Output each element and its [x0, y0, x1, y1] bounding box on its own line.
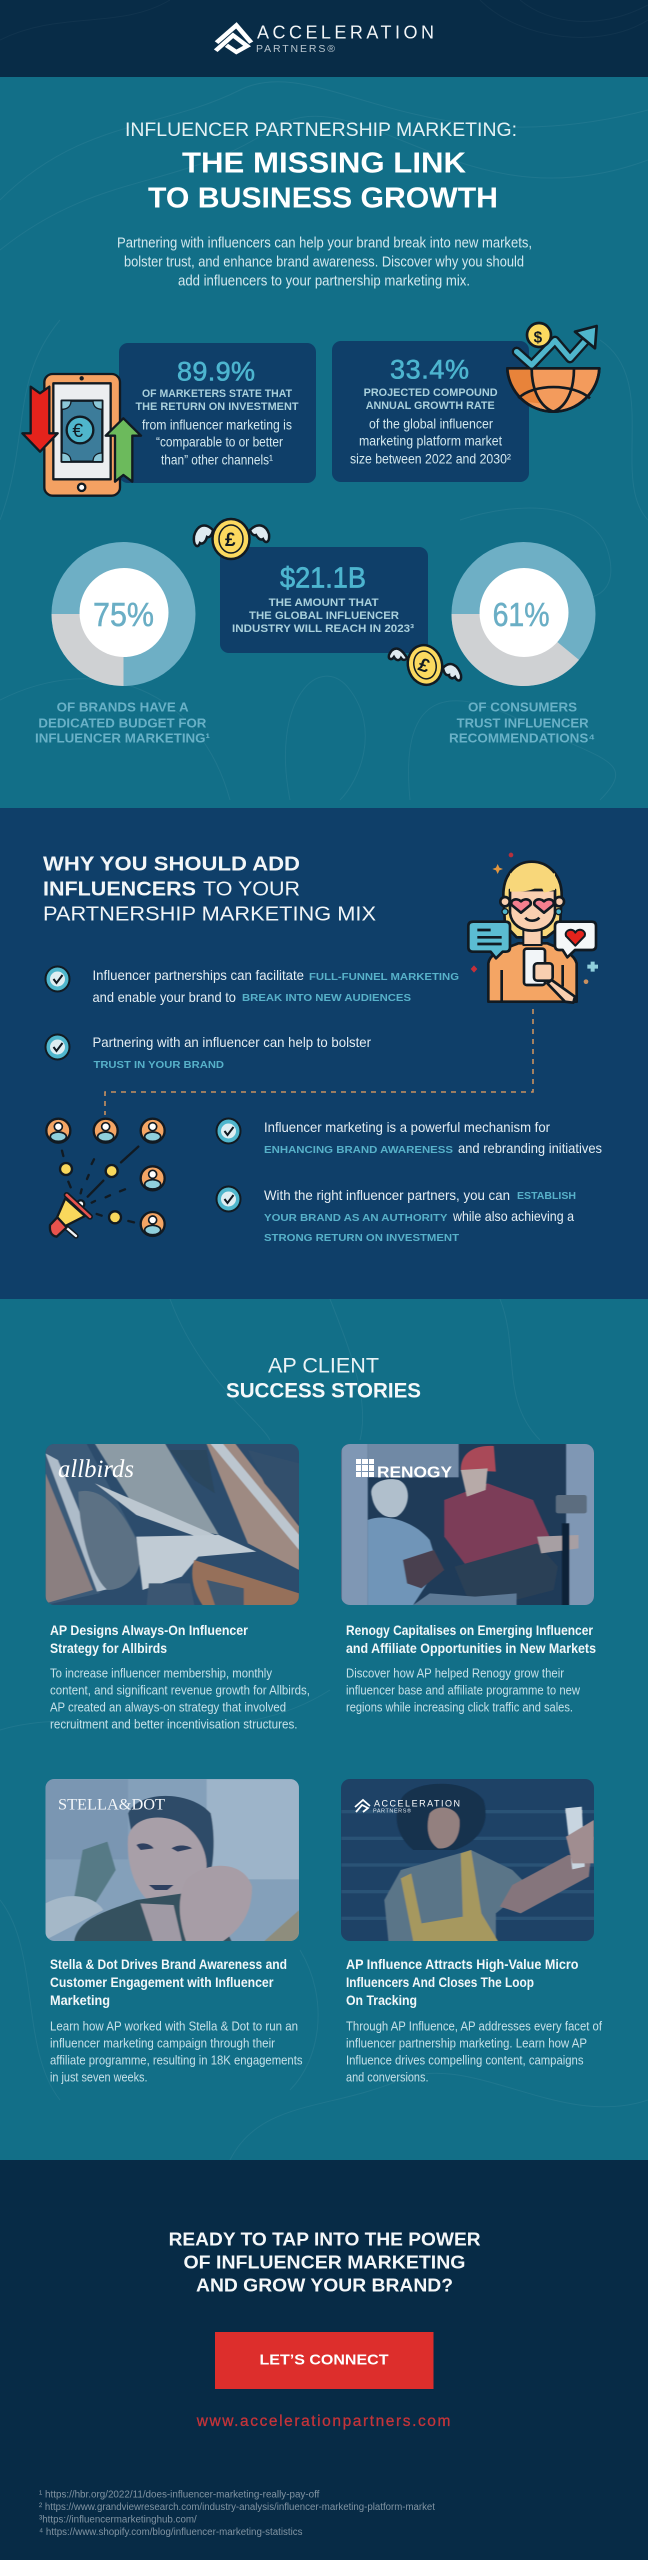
stat card: $21.1B: [220, 547, 428, 653]
text block: AP Influence story: and conversions.: [346, 2070, 428, 2084]
chart: 75% donut: 75%: [93, 596, 154, 633]
icon: check: [46, 1034, 70, 1060]
panel: client success stories: [0, 1299, 648, 2160]
panel: call to action and footer: [0, 2160, 648, 2560]
icon: phone with money and arrows: [22, 374, 141, 496]
list item: full-funnel marketing: Influencer partnerships can facilitate: [92, 967, 304, 983]
link: website: www.accelerationpartners.com: [196, 2413, 450, 2430]
list item: full-funnel marketing: [46, 966, 459, 1005]
list item: full-funnel marketing: and enable your brand to: [92, 989, 236, 1005]
stat card: 89.9%: [119, 343, 316, 483]
heading: why you should add influencers: TO YOUR: [203, 877, 300, 900]
text block: AP Influence story: Influence drives compelling content, campaigns: [346, 2054, 584, 2068]
heading: call to action: OF INFLUENCER MARKETING: [184, 2252, 466, 2272]
text block: AP Influence story: [346, 2020, 602, 2084]
photo: woman taking selfie: [341, 1779, 595, 1941]
list item: establish authority: while also achieving a: [452, 1208, 574, 1224]
stat card: 33.4%: marketing platform market: [359, 434, 502, 448]
text block: Renogy story: regions while increasing click traffic and sales.: [346, 1700, 573, 1714]
heading: Stella and Dot story: Stella & Dot Drives Brand Awareness and: [50, 1956, 287, 1972]
text block: Allbirds story: AP created an always-on strategy that involved: [50, 1700, 286, 1714]
heading: AP client success stories: AP CLIENT: [268, 1354, 379, 1378]
heading: Allbirds story: [50, 1622, 248, 1656]
text block: Renogy story: Discover how AP helped Renogy grow their: [346, 1666, 564, 1680]
heading: AP client success stories: SUCCESS STORIES: [226, 1380, 421, 1402]
logo: Acceleration Partners small: ACCELERATION: [374, 1798, 460, 1808]
text block: consumers trust: [449, 700, 595, 746]
icon: person: [141, 1212, 165, 1236]
list item: trust in your brand: TRUST IN YOUR BRAND: [94, 1059, 224, 1071]
logo: Renogy: RENOGY: [377, 1464, 453, 1482]
stat card: 89.9%: from influencer marketing is: [142, 418, 292, 432]
icon: check: [216, 1118, 240, 1144]
text block: brands with budget: DEDICATED BUDGET FOR: [38, 716, 206, 730]
heading: AP Influence story: AP Influence Attracts High-Value Micro: [346, 1956, 578, 1972]
heading: main title: TO BUSINESS GROWTH: [148, 182, 498, 214]
text block: footnotes: ³https://influencermarketinghub.com/: [39, 2514, 197, 2526]
stat card: 33.4%: size between 2022 and 2030²: [350, 452, 511, 466]
card: Stella and Dot: [45, 1779, 303, 2084]
chart: 61% donut: [452, 542, 596, 686]
chart: 75% donut: [52, 542, 196, 686]
heading: Allbirds story: AP Designs Always-On Influencer: [50, 1622, 248, 1638]
text block: footnotes: ¹ https://hbr.org/2022/11/does-influencer-marketing-really-pay-off: [39, 2490, 320, 2500]
heading: why you should add influencers: PARTNERSHIP MARKETING MIX: [43, 902, 376, 925]
stat card: 33.4%: of the global influencer: [369, 416, 493, 432]
text block: footnotes: ² https://www.grandviewresearch.com/industry-analysis/influencer-marketing-platform-market: [39, 2502, 435, 2513]
heading: call to action: AND GROW YOUR BRAND?: [196, 2274, 453, 2296]
list item: full-funnel marketing: FULL-FUNNEL MARKETING: [309, 971, 459, 983]
heading: Stella and Dot story: Customer Engagement with Influencer: [50, 1974, 274, 1990]
list item: establish authority: ESTABLISH: [517, 1190, 576, 1202]
heading: Stella and Dot story: [50, 1956, 287, 2008]
icon: person: [46, 1119, 70, 1143]
logo: Acceleration Partners small: PARTNERS®: [373, 1808, 411, 1814]
icon: winged coin bottom: [389, 641, 461, 689]
icon: megaphone network: [46, 1119, 165, 1237]
icon: globe with growth arrow: $: [534, 330, 543, 347]
stat card: 33.4%: [332, 341, 529, 482]
text block: AP Influence story: influencer partnership marketing. Learn how AP: [346, 2036, 587, 2050]
icon: globe with growth arrow: [507, 323, 599, 412]
text block: Renogy story: influencer base and affiliate programme to new: [346, 1684, 581, 1698]
heading: main title: THE MISSING LINK: [182, 147, 466, 179]
list item: establish authority: STRONG RETURN ON INVESTMENT: [264, 1232, 460, 1244]
stat card: $21.1B: $21.1B: [280, 562, 366, 594]
chart: 61% donut: 61%: [493, 596, 550, 633]
text block: Stella and Dot story: influencer marketing campaign through their: [50, 2036, 275, 2050]
heading: call to action: [169, 2228, 481, 2296]
text block: intro paragraph: [117, 236, 532, 290]
text block: intro paragraph: add influencers to your partnership marketing mix.: [178, 274, 470, 290]
text block: brands with budget: OF BRANDS HAVE A: [57, 700, 189, 714]
arrow: dashed connector: [105, 1009, 533, 1115]
logo: Acceleration Partners: PARTNERS®: [256, 43, 335, 55]
icon: check: [216, 1186, 240, 1212]
list item: establish authority: With the right influencer partners, you can: [264, 1187, 510, 1203]
card: Renogy: [341, 1444, 596, 1714]
stat card: 33.4%: 33.4%: [390, 355, 469, 385]
stat card: 89.9%: THE RETURN ON INVESTMENT: [136, 401, 299, 413]
stat card: $21.1B: THE AMOUNT THAT: [269, 597, 379, 609]
heading: why you should add influencers: WHY YOU SHOULD ADD: [43, 852, 300, 875]
list item: trust in your brand: [46, 1034, 371, 1071]
icon: person: [141, 1166, 165, 1190]
button: let's connect: [215, 2332, 434, 2389]
card: AP Influence: [341, 1779, 602, 2084]
icon: winged coin top: £: [225, 530, 236, 551]
text block: consumers trust: RECOMMENDATIONS⁴: [449, 732, 595, 746]
heading: Stella and Dot story: Marketing: [50, 1992, 110, 2008]
heading: AP client success stories: [226, 1354, 421, 1402]
heading: main title: [148, 147, 498, 214]
photo: Allbirds shoes: [45, 1444, 299, 1605]
photo: woman with earring: [45, 1779, 299, 1941]
list item: brand awareness: and rebranding initiatives: [458, 1140, 602, 1156]
icon: winged coin top: [194, 519, 269, 559]
button: let's connect: LET’S CONNECT: [260, 2352, 388, 2368]
stat card: 89.9%: than” other channels¹: [161, 452, 273, 468]
text block: brands with budget: [35, 700, 210, 746]
icon: person: [94, 1119, 118, 1143]
logo: Acceleration Partners: ACCELERATION: [257, 22, 434, 42]
heading: why you should add influencers: [43, 852, 376, 925]
icon: check: [46, 966, 70, 992]
heading: AP Influence story: Influencers And Closes The Loop: [346, 1974, 534, 1990]
text block: Stella and Dot story: [50, 2020, 302, 2084]
text block: Stella and Dot story: in just seven weeks.: [50, 2070, 148, 2084]
text block: consumers trust: TRUST INFLUENCER: [457, 716, 589, 730]
panel: intro and statistics: [0, 77, 648, 808]
text block: intro paragraph: bolster trust, and enhance brand awareness. Discover why you should: [124, 254, 524, 270]
icon: winged coin bottom: £: [415, 654, 433, 678]
logo: Acceleration Partners: [216, 22, 434, 55]
text block: Stella and Dot story: Learn how AP worked with Stella & Dot to run an: [50, 2020, 298, 2034]
stat card: 89.9%: “comparable to or better: [156, 434, 283, 450]
text block: footnotes: [39, 2490, 435, 2538]
heading: Renogy story: and Affiliate Opportunities in New Markets: [346, 1640, 596, 1656]
heading: AP Influence story: [346, 1956, 578, 2008]
list item: brand awareness: ENHANCING BRAND AWARENESS: [264, 1144, 453, 1156]
text block: consumers trust: OF CONSUMERS: [468, 700, 577, 714]
list item: trust in your brand: Partnering with an influencer can help to bolster: [92, 1034, 371, 1050]
icon: influencer with speech bubbles: [468, 853, 598, 1003]
heading: Allbirds story: Strategy for Allbirds: [50, 1640, 167, 1656]
heading: why you should add influencers: INFLUENCERS: [43, 877, 196, 900]
logo: allbirds: allbirds: [58, 1456, 134, 1483]
stat card: 89.9%: OF MARKETERS STATE THAT: [142, 388, 292, 400]
text block: Stella and Dot story: affiliate programme, resulting in 18K engagements: [50, 2054, 302, 2068]
list item: brand awareness: [216, 1118, 602, 1156]
panel: header bar: [0, 0, 648, 77]
heading: Renogy story: [346, 1622, 596, 1656]
logo: Renogy: [356, 1459, 453, 1482]
text block: AP Influence story: Through AP Influence, AP addresses every facet of: [346, 2020, 602, 2034]
text block: footnotes: ⁴ https://www.shopify.com/blog/influencer-marketing-statistics: [39, 2527, 302, 2538]
list item: establish authority: YOUR BRAND AS AN AUTHORITY: [264, 1212, 448, 1224]
text block: Allbirds story: content, and significant revenue growth for Allbirds,: [50, 1684, 310, 1698]
logo: Acceleration Partners small: [355, 1798, 460, 1814]
panel: why add influencers: [0, 808, 648, 1299]
text block: brands with budget: INFLUENCER MARKETING¹: [35, 732, 210, 746]
icon: person: [141, 1119, 165, 1143]
stat card: $21.1B: THE GLOBAL INFLUENCER: [249, 610, 399, 622]
text block: Allbirds story: To increase influencer membership, monthly: [50, 1666, 273, 1680]
heading: AP Influence story: On Tracking: [346, 1992, 417, 2008]
text block: Allbirds story: recruitment and better incentivisation structures.: [50, 1718, 298, 1732]
list item: full-funnel marketing: BREAK INTO NEW AUDIENCES: [242, 992, 411, 1004]
heading: call to action: READY TO TAP INTO THE POWER: [169, 2228, 481, 2250]
text block: Allbirds story: [50, 1666, 310, 1732]
stat card: $21.1B: INDUSTRY WILL REACH IN 2023³: [232, 623, 414, 635]
text block: intro paragraph: Partnering with influencers can help your brand break into new markets,: [117, 236, 532, 252]
heading: Renogy story: Renogy Capitalises on Emerging Influencer: [346, 1622, 593, 1638]
photo: Renogy influencers: [341, 1444, 595, 1605]
logo: Stella and Dot: STELLA&DOT: [58, 1796, 165, 1814]
stat card: 33.4%: PROJECTED COMPOUND: [364, 387, 498, 399]
text block: Renogy story: [346, 1666, 581, 1714]
stat card: 33.4%: ANNUAL GROWTH RATE: [366, 400, 495, 412]
list item: establish authority: [216, 1186, 576, 1244]
stat card: 89.9%: 89.9%: [177, 357, 255, 387]
icon: phone with money and arrows: €: [72, 421, 83, 442]
list item: brand awareness: Influencer marketing is a powerful mechanism for: [264, 1119, 550, 1135]
card: Allbirds: [45, 1444, 310, 1732]
heading: kicker: INFLUENCER PARTNERSHIP MARKETING:: [125, 120, 517, 141]
